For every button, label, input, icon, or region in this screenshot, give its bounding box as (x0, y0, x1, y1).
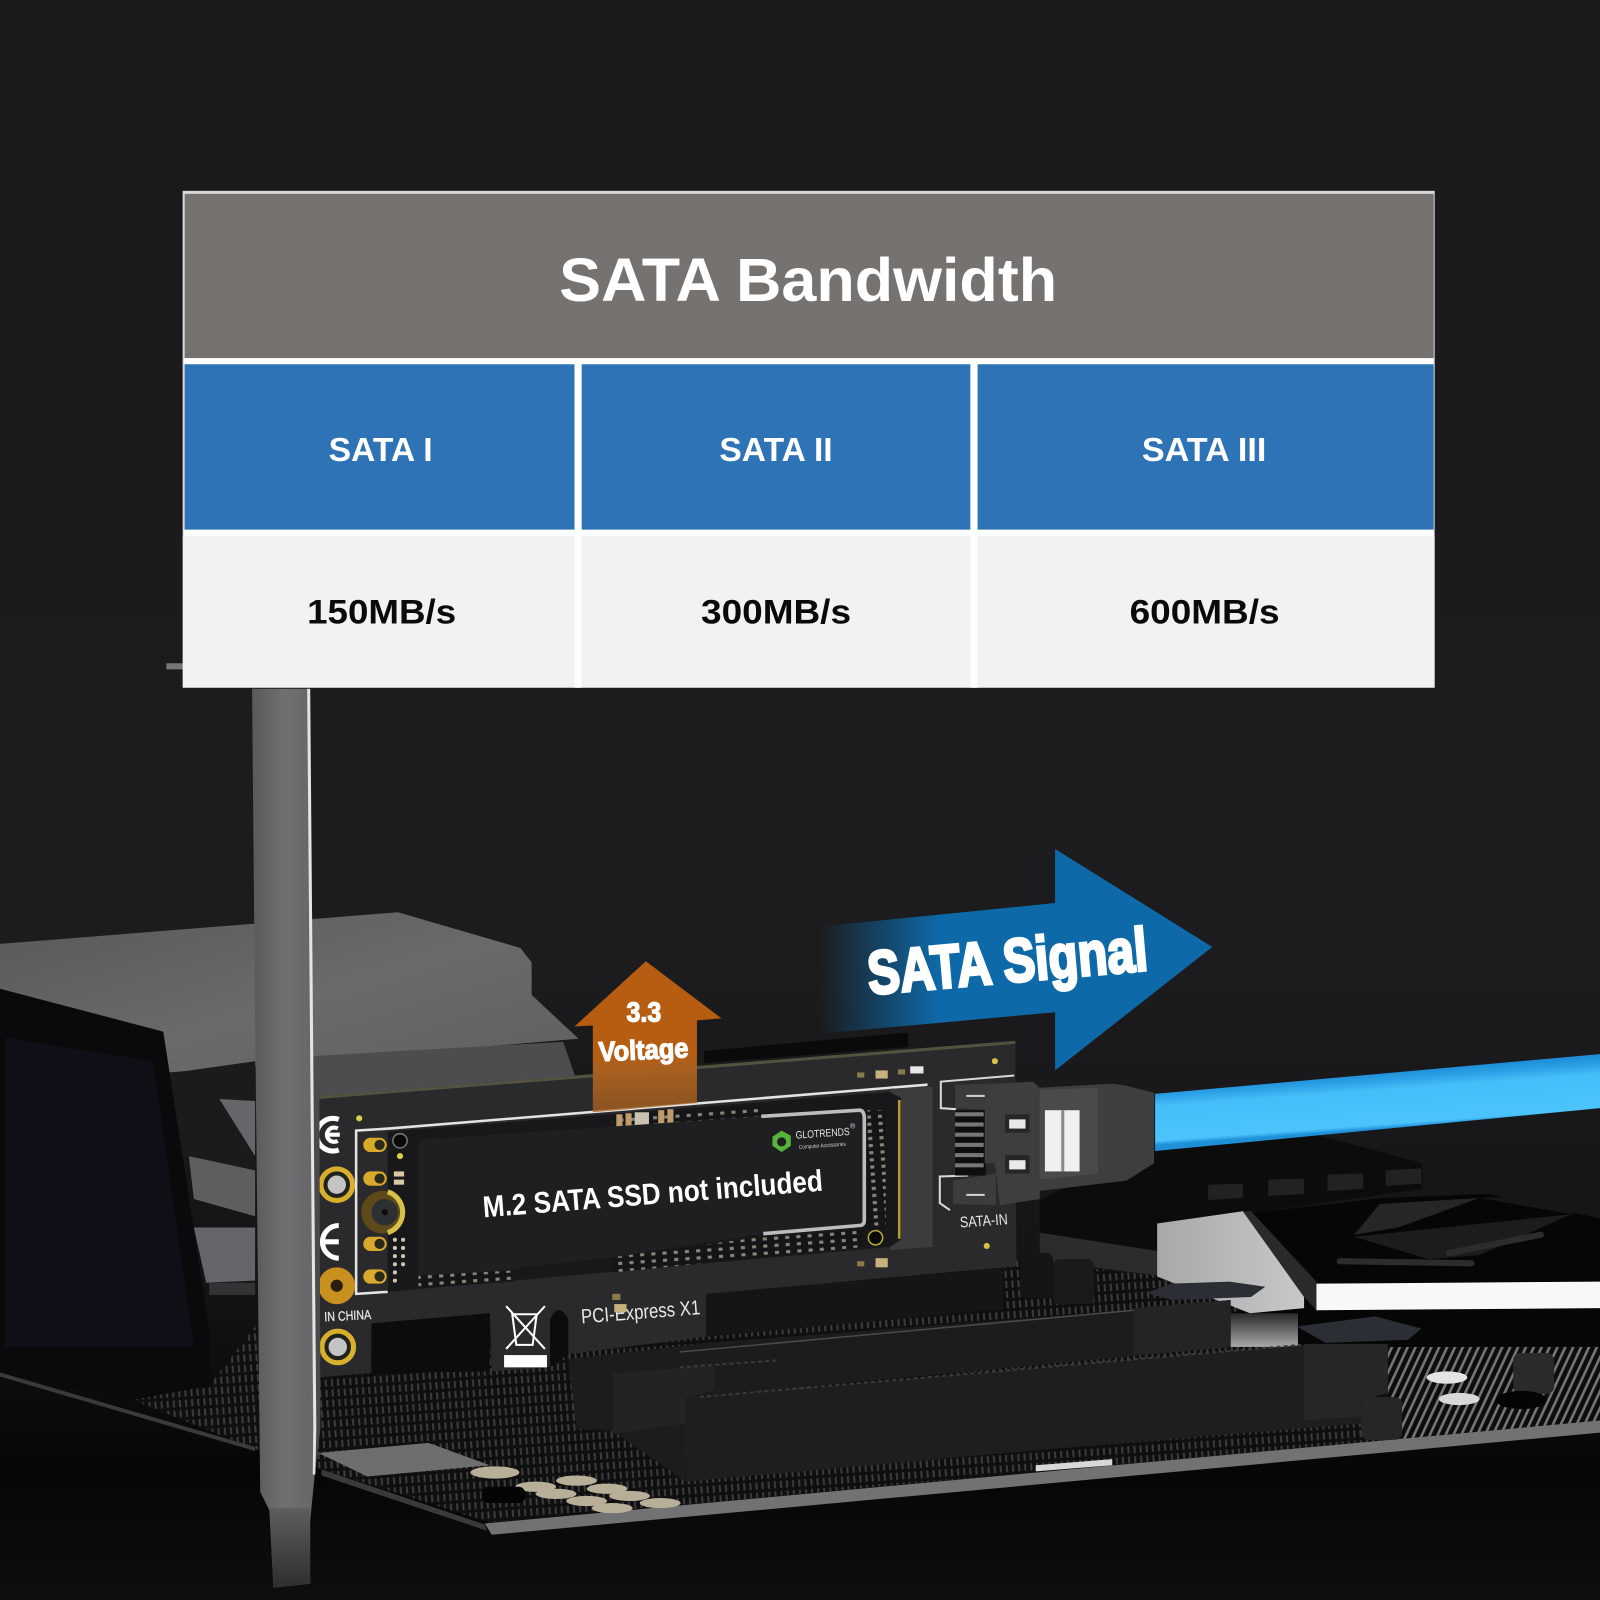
illustration: dark shroud (0, 989, 209, 1400)
expansion card white silkscreen frame (356, 1085, 928, 1294)
header cell: SATA I: SATA I (329, 432, 433, 469)
table title: SATA Bandwidth (559, 246, 1057, 314)
SSD label right outline (761, 1110, 864, 1234)
header cell: SATA II: SATA II (719, 432, 833, 469)
M.2 mounting screw (361, 1191, 404, 1234)
arrow: SATA Signal: SATA Signal (865, 915, 1150, 1007)
header cell: SATA I (185, 364, 574, 530)
text: M.2 SATA SSD not included: M.2 SATA SSD not included (482, 1165, 824, 1224)
SATA port (940, 1076, 1014, 1210)
SSD label panel (418, 1110, 864, 1276)
arrow: 3.3 Voltage: 3.3 (627, 996, 661, 1027)
text: SATA-IN: SATA-IN (959, 1211, 1008, 1232)
SATA connector plug (985, 1082, 1154, 1205)
header cell: SATA III: SATA III (1142, 432, 1266, 469)
value: 600MB/s: 600MB/s (1130, 593, 1280, 631)
header cell: SATA II (582, 364, 970, 530)
arrow: 3.3 Voltage (574, 961, 721, 1112)
card markings: certification logos and screws (317, 1118, 372, 1363)
icon: WEEE crossed-out bin (504, 1306, 547, 1367)
table title bar (185, 194, 1434, 358)
value: 300MB/s: 300MB/s (701, 593, 851, 631)
SATA cable (1155, 1054, 1600, 1151)
SSD PCB (388, 1092, 901, 1292)
illustration: motherboard (0, 1260, 1600, 1535)
text: PCI-Express X1: PCI-Express X1 (580, 1297, 701, 1328)
expansion card PCB (318, 1033, 1016, 1378)
value: 150MB/s: 150MB/s (307, 593, 456, 631)
gold contacts on M.2 holder (363, 1138, 387, 1284)
illustration: chipset cover (1157, 1194, 1600, 1347)
header cell: SATA III (978, 364, 1434, 530)
illustration: expansion slots (568, 1268, 1421, 1482)
arrow: SATA Signal (819, 849, 1212, 1070)
PCIe bracket (252, 689, 320, 1588)
logo: GLOTRENDS (772, 1123, 856, 1152)
illustration: black VRM heatsink (1020, 1135, 1422, 1304)
arrow: 3.3 Voltage: Voltage (598, 1032, 689, 1067)
small bracket tab (166, 663, 184, 669)
logo: GLOTRENDS: GLOTRENDS (795, 1126, 850, 1142)
logo: GLOTRENDS: Computer Accessories (799, 1142, 846, 1151)
table: SATA Bandwidth (183, 191, 1435, 688)
card markings: certification logos and screws: IN CHINA (324, 1307, 372, 1324)
illustration: graphics card heatsink (0, 912, 579, 1295)
M.2 socket (890, 1087, 933, 1250)
small SMD parts on card (356, 1058, 998, 1312)
logo: GLOTRENDS: ® (850, 1123, 856, 1131)
value cells background (183, 364, 1435, 688)
table white gridlines (184, 358, 1434, 537)
